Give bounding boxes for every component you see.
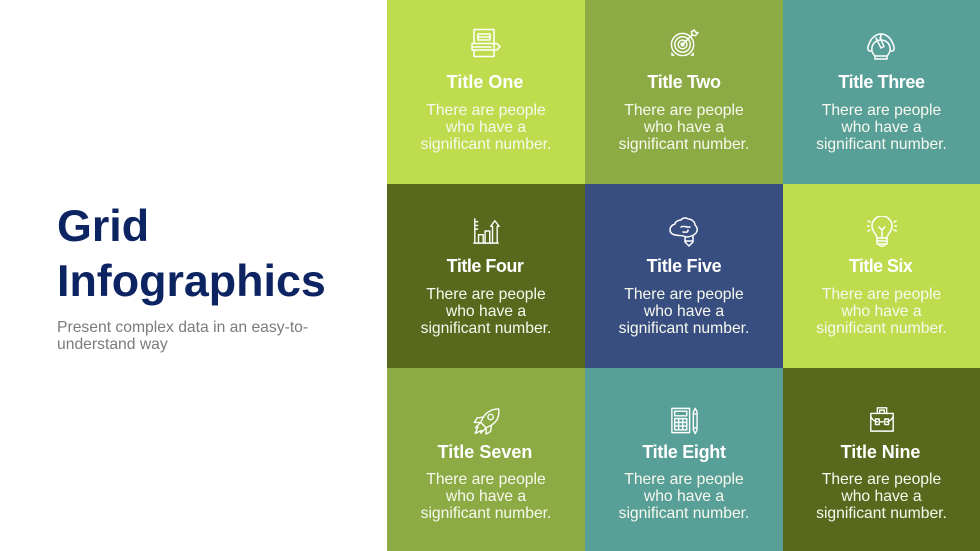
body text [421,102,551,153]
icon: brain [669,217,698,247]
panel: title three [783,0,980,184]
body text: There are people [822,286,941,303]
body text: There are people [426,286,546,303]
icon: book [471,28,501,58]
body text [421,286,551,337]
panel: title four [387,184,585,368]
icon: calculator and pen [671,408,698,434]
panel: title nine [783,368,980,551]
subtitle: understand way [57,336,168,353]
body text: who have a [446,119,526,136]
heading: Grid Infographics [57,201,326,306]
title text: Title Five [647,256,721,276]
heading: Grid Infographics: Infographics [57,256,326,306]
body text [619,471,749,522]
body text: There are people [624,286,744,303]
body text: who have a [841,119,922,136]
title text: Title Nine [841,442,920,462]
body text: significant number. [421,136,551,153]
body text [619,286,749,337]
icon: bar chart [473,218,500,244]
body text: who have a [644,303,724,320]
body text: significant number. [421,320,551,337]
title text: Title Six [849,256,912,276]
heading: Grid Infographics: Grid [57,201,149,251]
body text: who have a [841,303,922,320]
body text: significant number. [816,320,947,337]
panel: title one [387,0,585,184]
panel: title seven [387,368,585,551]
body text [619,102,749,153]
body text: who have a [446,303,526,320]
title text: Title Three [838,72,925,92]
icon: gauge [867,33,895,60]
body text [816,102,947,153]
body text: significant number. [619,136,749,153]
body text: There are people [426,471,546,488]
icon: briefcase [870,407,894,432]
title text: Title Four [447,256,523,276]
panel: title eight [585,368,783,551]
body text [816,286,947,337]
body text: There are people [822,102,941,119]
body text: There are people [426,102,546,119]
body text: There are people [822,471,941,488]
body text: who have a [644,488,724,505]
panel: title two [585,0,783,184]
body text: significant number. [619,505,749,522]
title text: Title Eight [642,442,726,462]
title text: Title Two [647,72,721,92]
title text: Title Seven [438,442,532,462]
body text: There are people [624,471,744,488]
subtitle: Present complex data in an easy-to- [57,318,308,336]
body text: significant number. [619,320,749,337]
panel: title five [585,184,783,368]
body text: significant number. [816,136,947,153]
body text: who have a [644,119,724,136]
body text [816,471,947,522]
body text [421,471,551,522]
panel: title six [783,184,980,368]
title text: Title One [447,72,523,92]
icon: light bulb [867,216,897,247]
subtitle [57,318,308,353]
body text: significant number. [421,505,551,522]
body text: significant number. [816,505,947,522]
body text: who have a [841,488,922,505]
icon: target with arrow [670,29,699,56]
body text: who have a [446,488,526,505]
icon: rocket [474,408,500,435]
body text: There are people [624,102,744,119]
